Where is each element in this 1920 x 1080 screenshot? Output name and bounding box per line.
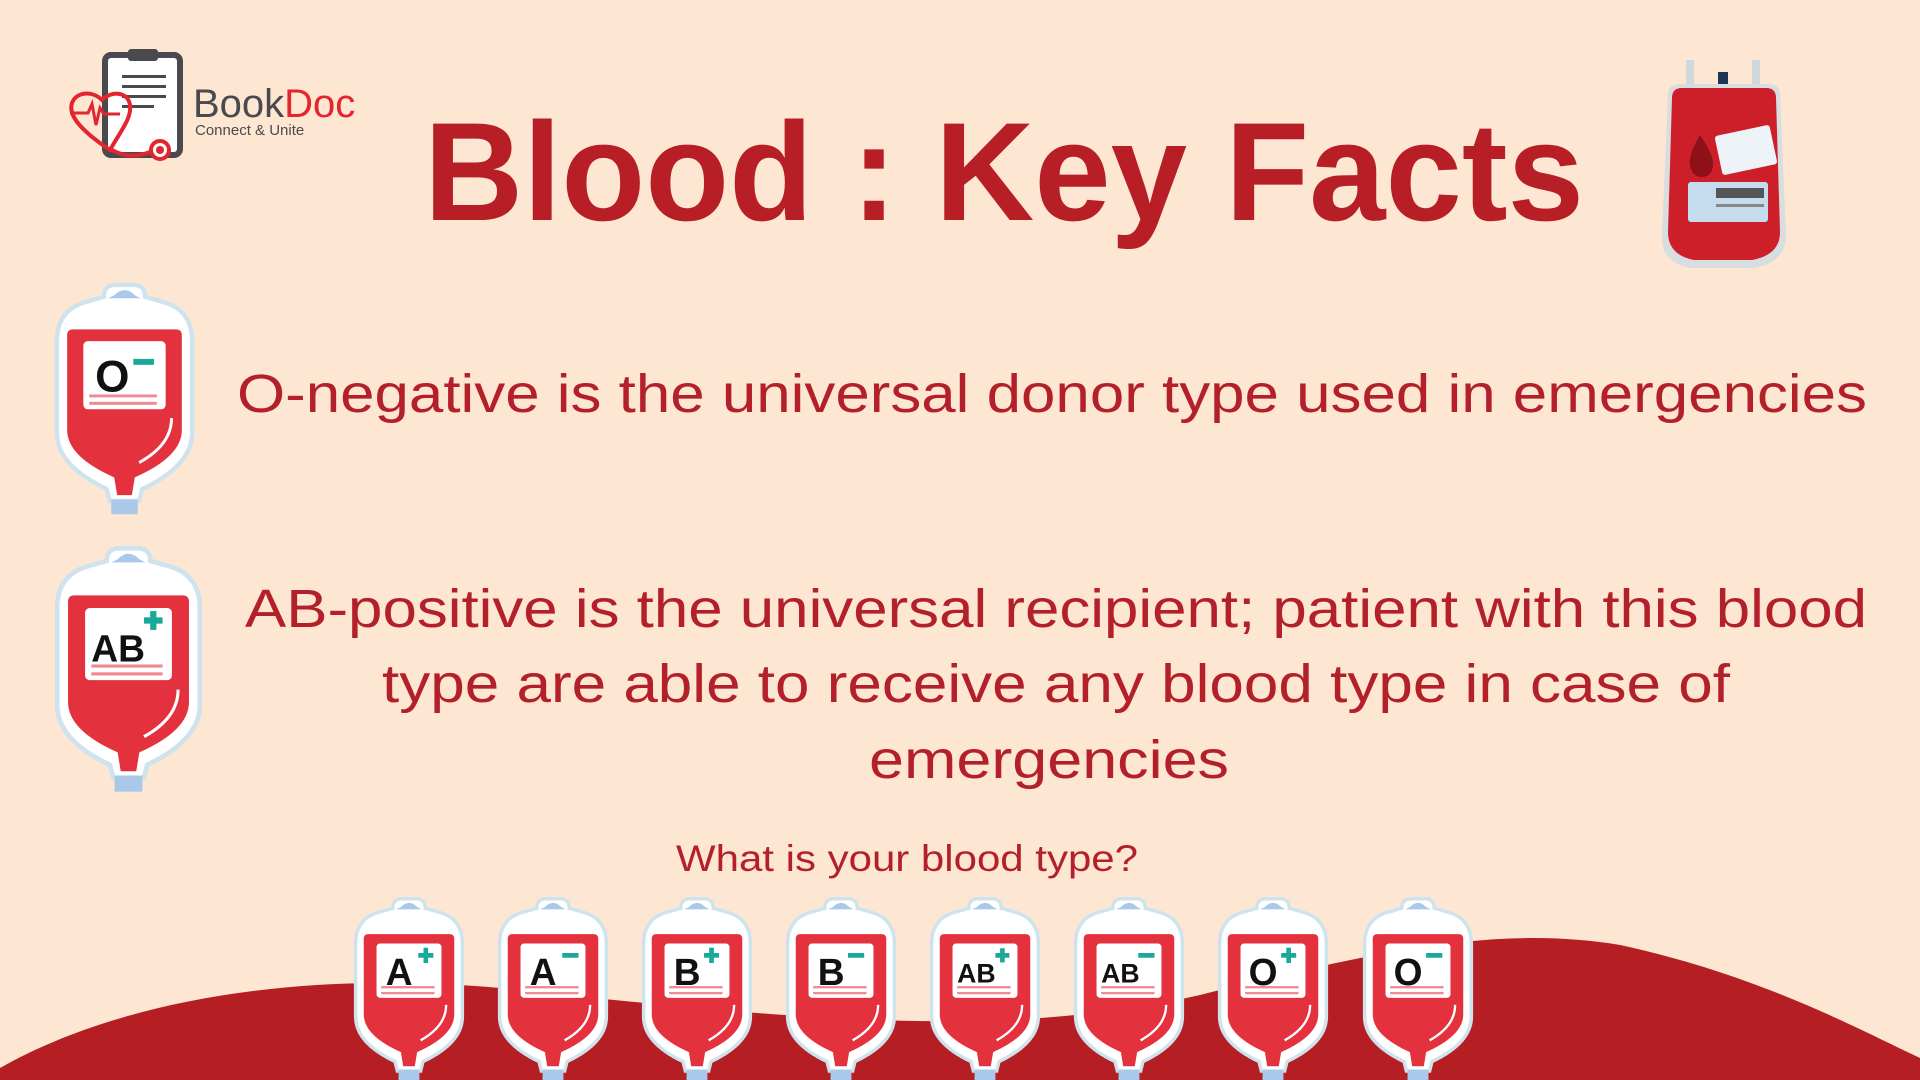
bottom wave	[0, 938, 1920, 1080]
bag A+: A	[386, 951, 413, 993]
bag AB-	[1076, 899, 1182, 1080]
bag AB+: AB	[957, 958, 996, 989]
bag A+	[356, 899, 462, 1080]
fact 1: O-negative	[57, 285, 1867, 514]
logo	[70, 49, 355, 159]
icon: AB+ bag	[57, 548, 200, 792]
bag AB+	[932, 899, 1038, 1080]
text: AB-positive fact	[245, 579, 1867, 790]
blood type bags row	[356, 899, 1471, 1080]
bag B+: B	[674, 951, 701, 993]
question: What is your blood type?	[676, 838, 1138, 879]
text: AB-positive fact: type are able to receive any blood type in case of	[382, 654, 1731, 714]
icon: AB+ bag: AB	[91, 627, 145, 669]
icon: top right blood bag	[1662, 60, 1786, 268]
bag O-	[1365, 899, 1471, 1080]
bag B+	[644, 899, 750, 1080]
text: O-negative fact: O-negative is the universal donor type used in emergencies	[237, 364, 1867, 424]
bag O+	[1220, 899, 1326, 1080]
logo: BookDoc	[193, 82, 355, 126]
bag B-	[788, 899, 894, 1080]
bag O+: O	[1249, 951, 1278, 993]
fact 2: AB-positive	[57, 548, 1867, 792]
bag A-: A	[530, 951, 557, 993]
text: AB-positive fact: emergencies	[869, 730, 1229, 790]
logo: Connect & Unite	[195, 122, 304, 139]
bag A-	[500, 899, 606, 1080]
bag AB-: AB	[1101, 958, 1140, 989]
icon: O- bag	[57, 285, 192, 514]
bag B-: B	[818, 951, 845, 993]
title: Blood : Key Facts	[424, 93, 1584, 250]
icon: O- bag: O	[95, 352, 129, 402]
text: AB-positive fact: AB-positive is the universal recipient; patient with this blood	[245, 579, 1867, 639]
bag O-: O	[1394, 951, 1423, 993]
